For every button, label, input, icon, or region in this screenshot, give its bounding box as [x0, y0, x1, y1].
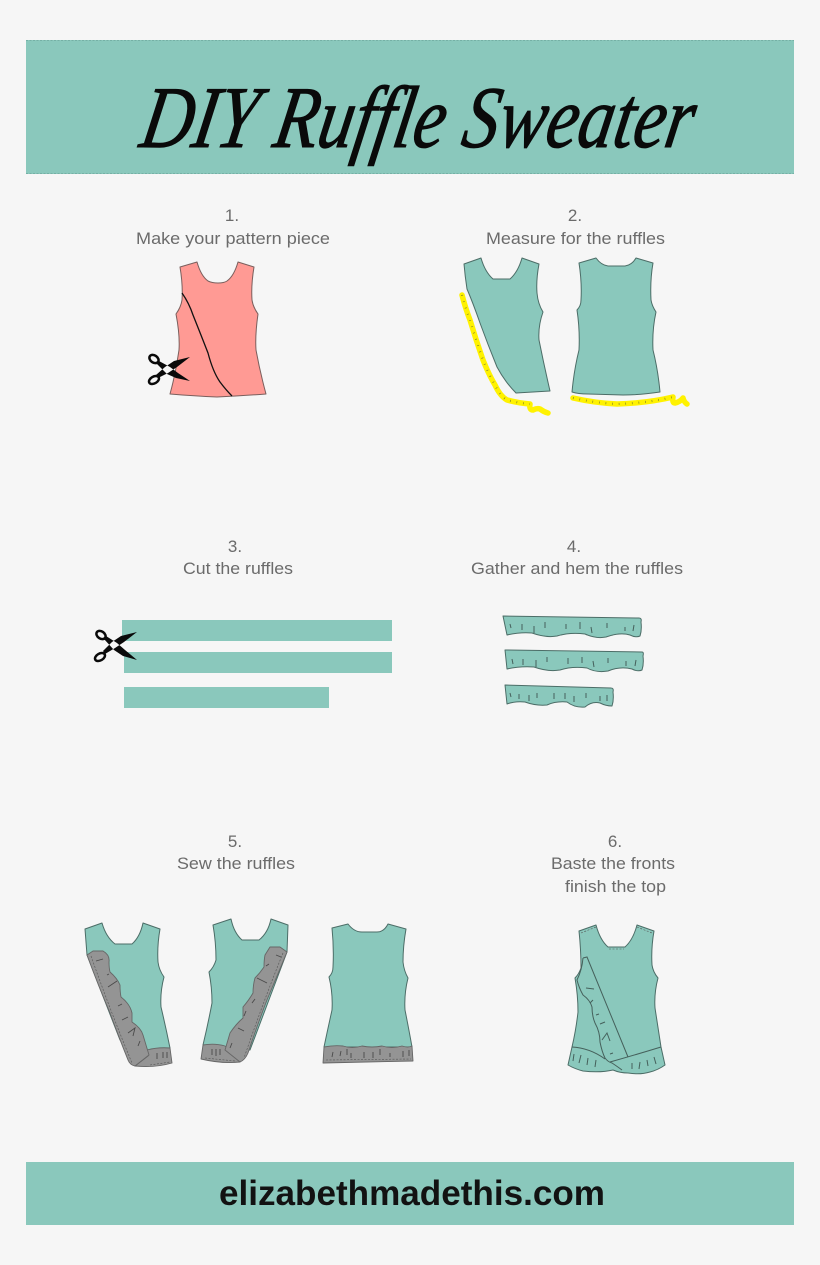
gathered ruffle strips	[503, 616, 643, 707]
step 4 heading: 4.	[567, 537, 581, 556]
right front with ruffle	[201, 919, 288, 1063]
step 6 heading: 6.	[608, 832, 622, 851]
step 6 heading	[551, 832, 675, 896]
step 1 heading	[136, 206, 330, 248]
panel: step 2 measure for the ruffles	[462, 206, 687, 413]
step 1 heading: 1.	[225, 206, 239, 225]
yellow measuring tape	[462, 295, 687, 413]
icon: scissors	[148, 353, 190, 386]
step 1 heading: Make your pattern piece	[136, 229, 330, 248]
fabric strips	[122, 620, 392, 708]
title: DIY Ruffle Sweater	[134, 70, 704, 167]
pink tank pattern piece	[170, 262, 266, 397]
step 6 heading: Baste the fronts	[551, 854, 675, 873]
left front with ruffle	[85, 923, 172, 1067]
step 2 heading: Measure for the ruffles	[486, 229, 665, 248]
step 3 heading	[183, 537, 293, 578]
cut front piece	[464, 258, 550, 393]
step 5 heading	[177, 832, 295, 873]
back piece	[572, 258, 660, 395]
footer banner	[26, 1162, 794, 1225]
panel: step 3 cut the ruffles	[94, 537, 392, 708]
step 3 heading: 3.	[228, 537, 242, 556]
website url: elizabethmadethis.com	[219, 1174, 605, 1213]
step 5 heading: Sew the ruffles	[177, 854, 295, 873]
icon: scissors	[94, 629, 137, 663]
cutting line	[182, 293, 232, 396]
step 2 heading	[486, 206, 665, 248]
finished top	[568, 925, 665, 1074]
panel: step 1 make your pattern piece	[136, 206, 330, 397]
step 2 heading: 2.	[568, 206, 582, 225]
step 4 heading	[471, 537, 683, 578]
panel: step 6 baste the fronts, finish the top	[551, 832, 675, 1074]
panel: step 4 gather and hem the ruffles	[471, 537, 683, 707]
panel: step 5 sew the ruffles	[85, 832, 413, 1067]
title banner	[26, 40, 794, 174]
step 4 heading: Gather and hem the ruffles	[471, 559, 683, 578]
step 3 heading: Cut the ruffles	[183, 559, 293, 578]
step 6 heading: finish the top	[565, 877, 666, 896]
step 5 heading: 5.	[228, 832, 242, 851]
back with ruffle	[323, 924, 413, 1063]
